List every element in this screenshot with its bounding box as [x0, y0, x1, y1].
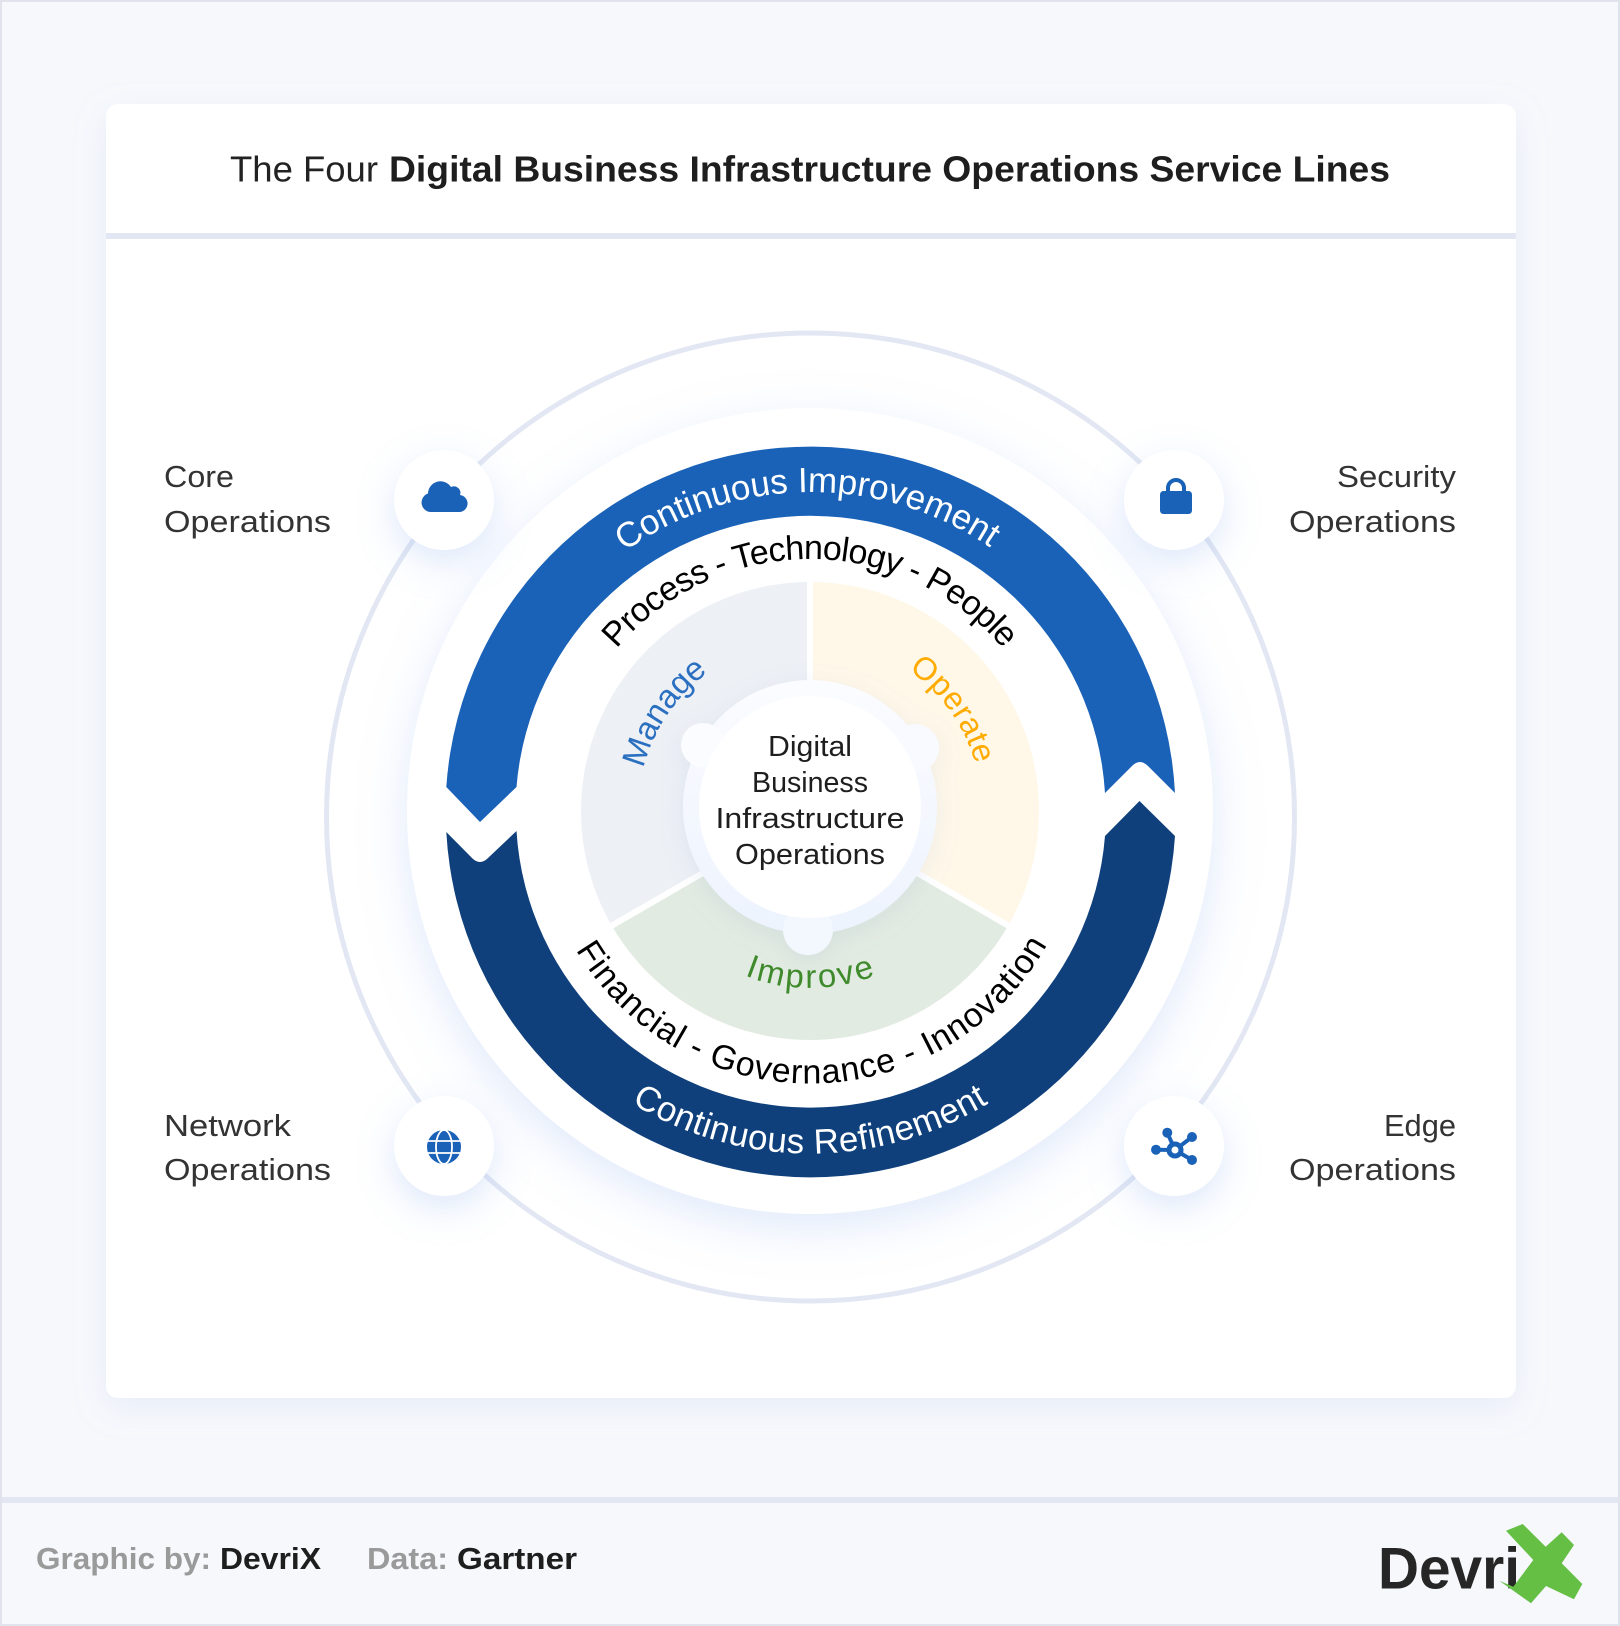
- footer credits: Graphic by:: [36, 1541, 211, 1576]
- logo: DevriX: [1378, 1524, 1582, 1603]
- footer credits: DevriX: [220, 1541, 321, 1576]
- sector: manage: [581, 582, 807, 923]
- footer credits: Data:: [367, 1541, 448, 1576]
- sector: manage: Manage: [622, 662, 704, 766]
- icon: network nodes: [1124, 1096, 1224, 1196]
- label: core operations: [164, 459, 331, 539]
- label: network operations: [164, 1108, 331, 1187]
- arc band: continuous refinement: Continuous Refinement: [636, 1086, 988, 1154]
- outer ring: [326, 333, 1294, 1301]
- sector: operate: Operate: [914, 657, 990, 762]
- panel: main card: [106, 104, 1516, 1398]
- label: security operations: [1289, 459, 1457, 539]
- arc band: continuous improvement: [446, 446, 1175, 822]
- title: Digital Business Infrastructure Operations Service Lines: [389, 149, 1390, 190]
- footer credits: [36, 1541, 577, 1576]
- label: edge operations: Operations: [1289, 1152, 1456, 1187]
- label: core operations: Core: [164, 459, 234, 494]
- center hub: Business: [752, 767, 868, 799]
- white disc: [407, 408, 1213, 1214]
- sector: improve: [614, 876, 1006, 1040]
- icon: lock: [1124, 450, 1224, 550]
- footer divider: [2, 1497, 1618, 1503]
- label: edge operations: Edge: [1384, 1108, 1456, 1143]
- label: security operations: Security: [1337, 459, 1457, 494]
- curved label: process technology people: Process - Technology - People: [601, 535, 1013, 647]
- curved label: financial governance innovation: Financial - Governance - Innovation: [577, 939, 1046, 1084]
- label: edge operations: [1289, 1108, 1456, 1187]
- logo: DevriX: Devri: [1378, 1536, 1520, 1602]
- arc band: continuous improvement: Continuous Improvement: [616, 468, 1000, 548]
- label: core operations: Operations: [164, 504, 331, 539]
- footer credits: Gartner: [457, 1541, 577, 1576]
- label: network operations: Operations: [164, 1152, 331, 1187]
- center hub: Digital: [768, 731, 852, 763]
- title: The Four: [230, 149, 378, 190]
- icon: cloud: [394, 450, 494, 550]
- arc band: continuous refinement: [446, 801, 1175, 1178]
- center hub: Operations: [735, 839, 885, 871]
- label: security operations: Operations: [1289, 504, 1456, 539]
- sector dividers: [606, 576, 1014, 929]
- center hub: [681, 680, 939, 955]
- center hub: Infrastructure: [716, 803, 904, 835]
- label: network operations: Network: [164, 1108, 292, 1143]
- sector: operate: [813, 582, 1039, 923]
- sector: improve: Improve: [748, 955, 872, 994]
- icon: globe: [394, 1096, 494, 1196]
